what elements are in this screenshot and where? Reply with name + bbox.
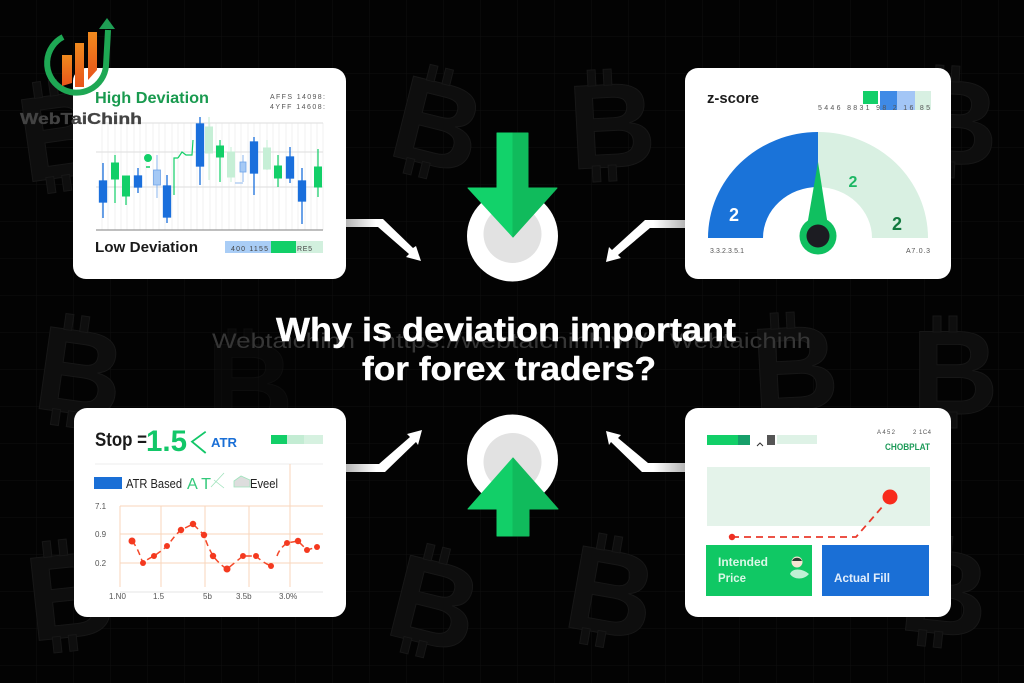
panel: high and low deviation [73,68,346,279]
title [276,311,736,387]
top status bar [707,435,817,446]
line chart: ATR levels: 1.5 [153,592,165,601]
scale bar [271,435,323,444]
background bitcoin symbols: B [912,306,998,440]
background bitcoin symbols: B [908,54,1002,192]
gauge axis labels [710,248,930,255]
watermark text: Webtaichinh [212,330,355,353]
icon: person [790,556,809,578]
arrow: top right connector [606,220,685,262]
box: actual fill: Actual Fill [834,571,890,585]
box: actual fill [822,545,929,596]
gauge axis labels: 3.3.2.3.5.1 [710,248,744,255]
background bitcoin symbols: B [565,57,659,195]
line chart: ATR levels: 3.5b [236,592,252,601]
panel: ATR stop [74,408,346,617]
gauge value labels: 2 [892,214,902,234]
logo: WebTaiChinh: WebTaiChinh [20,111,142,128]
gauge: blue segment [708,132,818,238]
gauge legend: 5446 8831 98 2 16 85 [818,105,930,112]
background bitcoin symbols: B [380,49,496,200]
line chart: ATR levels: 7.1 [95,502,107,511]
small data readout: AFFS 14098: [270,94,325,101]
candlestick chart [96,117,323,230]
watermark text: https://webtaichinh.vn/ [381,330,647,353]
heading: low deviation: Low Deviation [95,239,198,256]
line chart: ATR levels [95,464,323,601]
icon: bottom circle with up arrow [467,414,558,536]
line chart: ATR levels: 0.2 [95,559,107,568]
gauge axis labels: A7.0.3 [906,248,930,255]
gauge needle [800,162,836,254]
background bitcoin symbols: B [557,519,665,666]
background bitcoin symbols: B [28,301,132,445]
chart legend: Eveel [250,476,278,491]
line chart: ATR levels: 3.0% [279,592,297,601]
background bitcoin symbols: B [10,64,114,208]
slippage line [729,490,898,540]
background bitcoin symbols: B [377,528,493,679]
icon: top circle with down arrow [467,133,558,282]
chart legend: A T [187,476,211,493]
arrow: top left connector [346,219,421,261]
arrow: bottom right connector [606,431,685,472]
box: intended price: Intended [718,555,768,569]
gauge legend [818,91,931,112]
formula: stop equals 1.5 ATR: Stop = [95,430,147,451]
small readouts: A452 [877,430,896,436]
gauge: pale segment [818,132,928,238]
small readouts: 2 1C4 [913,430,932,436]
small readouts: CHOBPLAT [885,442,930,452]
panel: intended price versus actual fill [685,408,951,617]
formula: stop equals 1.5 ATR [95,425,238,458]
watermark text: Webtaichinh [670,330,811,353]
small data readout: 4YFF 14608: [270,104,325,111]
line chart: ATR levels: 0.9 [95,530,107,539]
background bitcoin symbols: B [748,300,842,438]
background bitcoin symbols: B [207,319,293,453]
chart legend [94,473,278,493]
box: intended price [706,545,812,596]
watermark text [212,330,811,353]
chart legend: ATR Based [126,476,182,491]
legend bar [225,241,323,253]
legend bar: 400 1155 [231,246,268,253]
gauge value labels: 2 [849,174,858,191]
box: intended price: Price [718,571,746,585]
gauge value labels [729,174,902,234]
arrow: bottom left connector [346,430,422,472]
small readouts [877,430,932,452]
title: Why is deviation important [276,311,736,348]
heading: high deviation: High Deviation [95,90,209,107]
formula: stop equals 1.5 ATR: 1.5 [146,425,187,458]
line chart: ATR levels: 5b [203,592,212,601]
price area [707,467,930,526]
title: for forex traders? [362,350,656,387]
background bitcoin symbols: B [895,522,995,664]
small data readout [270,94,325,111]
panel: z-score gauge [685,68,951,279]
formula: stop equals 1.5 ATR: ATR [211,435,238,450]
heading: z-score: z-score [707,90,759,107]
background bitcoin symbols: B [20,525,120,667]
line chart: ATR levels: 1.N0 [109,592,126,601]
legend bar: RE5 [297,246,312,253]
gauge value labels: 2 [729,205,739,225]
logo: WebTaiChinh [20,18,142,128]
